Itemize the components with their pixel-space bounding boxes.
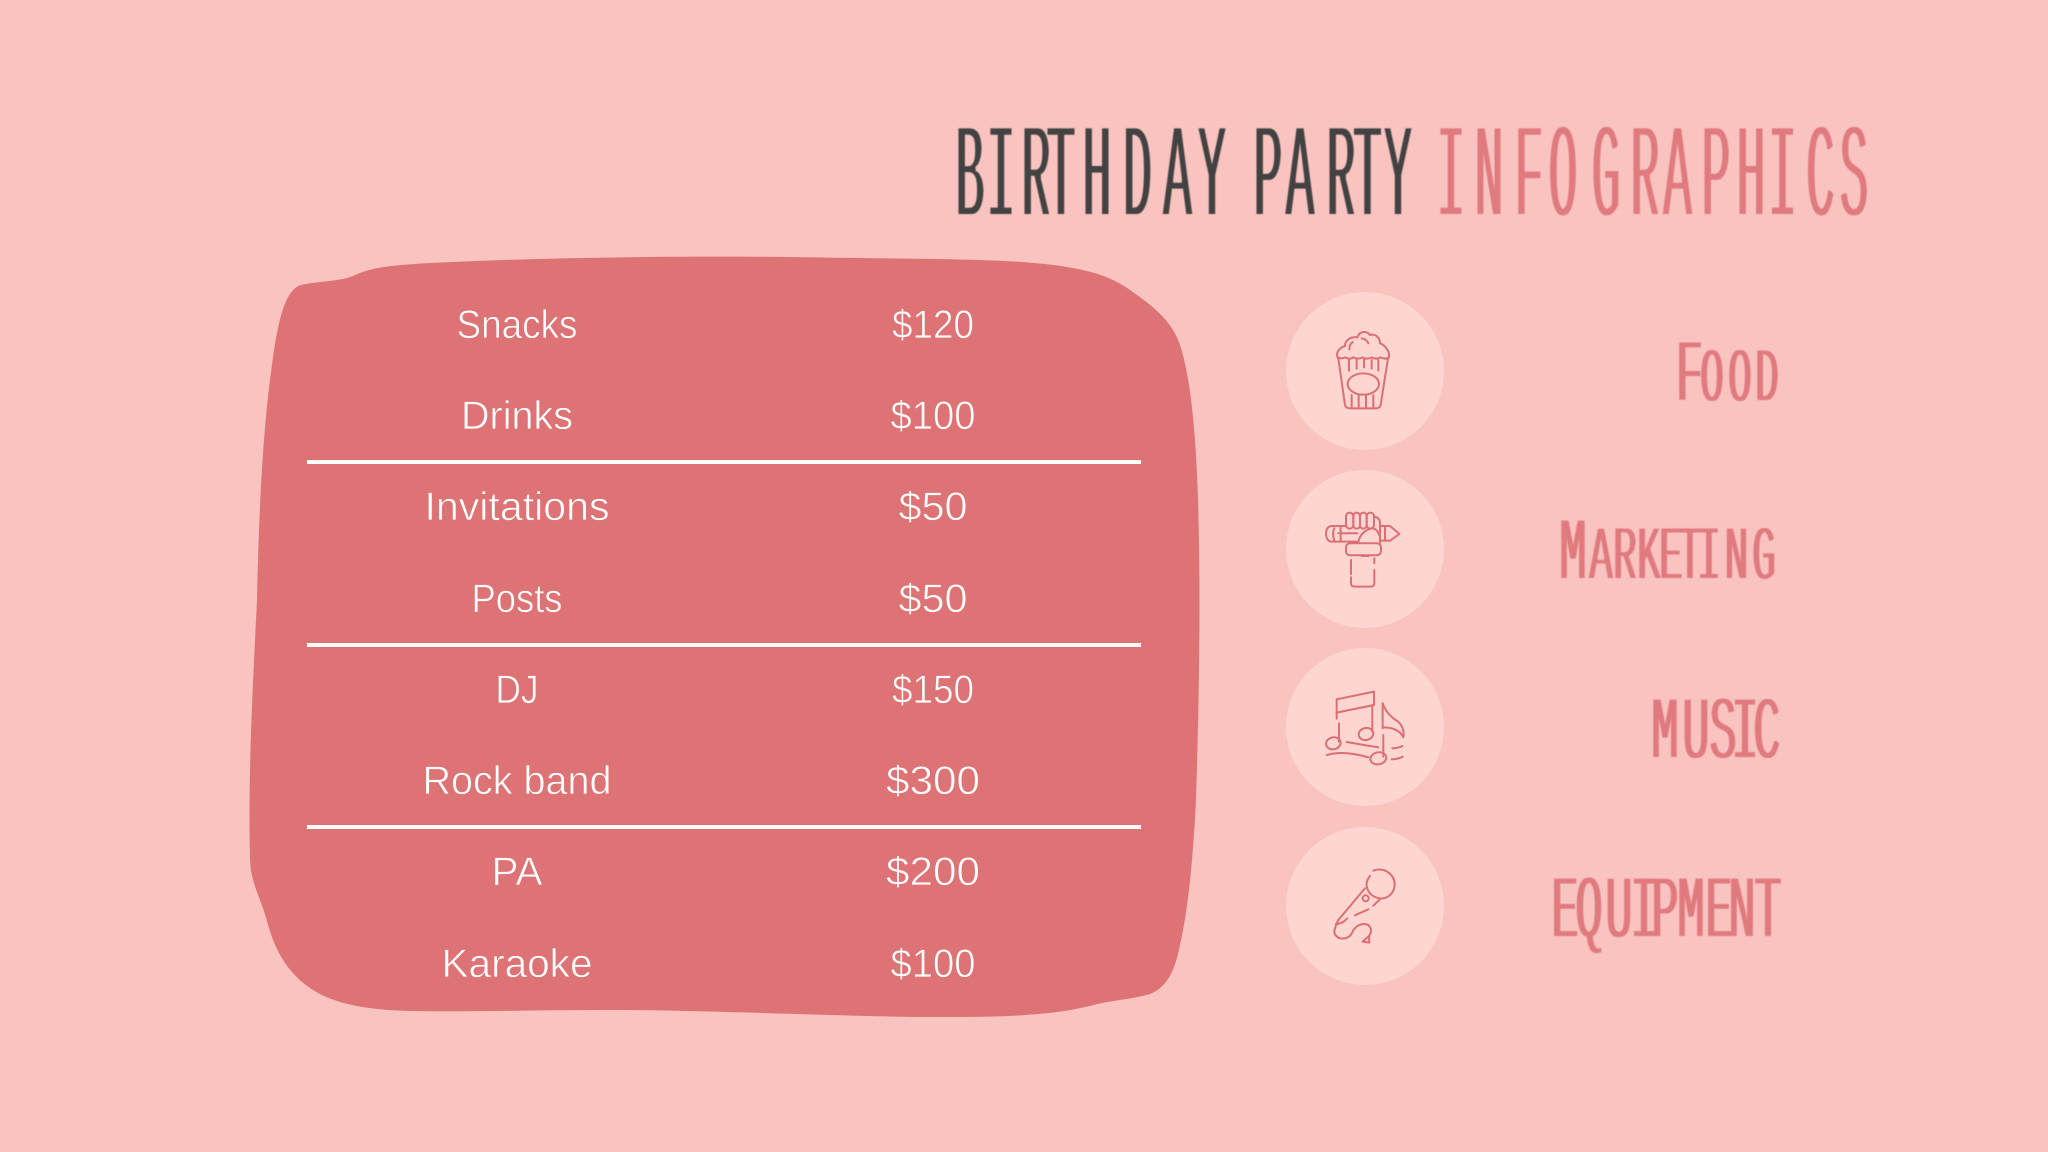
title [956,103,1868,257]
row: dj: DJ [496,668,538,712]
row: posts: $50 [898,577,968,621]
row: drinks [461,394,976,438]
row: posts: Posts [472,577,562,621]
row: pa [492,850,980,894]
row: drinks: Drinks [461,394,573,438]
row: snacks [456,303,974,347]
label: music: MUSIC [1651,685,1781,786]
row: karaoke: Karaoke [442,942,592,986]
row: pa: PA [492,850,543,894]
row: snacks: $120 [892,303,974,347]
row: rock band [422,759,980,803]
label: food: FOOD [1676,328,1779,429]
row: rock band: Rock band [422,759,612,803]
row: posts [472,577,968,621]
title: dark part: BIRTHDAY PARTY [956,103,1412,257]
label: equipment: EQUIPMENT [1551,864,1782,965]
icon: microphone [1286,827,1444,985]
row: pa: $200 [886,850,980,894]
row: karaoke [442,942,976,986]
title: pink part: INFOGRAPHICS [1437,103,1868,257]
icon: music notes [1286,648,1444,806]
row: dj: $150 [892,668,974,712]
row: dj [496,668,974,712]
row: snacks: Snacks [456,303,578,347]
icon: hand holding pencil [1286,470,1444,628]
row: invitations: $50 [898,485,968,529]
row: rock band: $300 [886,759,980,803]
icon: popcorn [1286,292,1444,450]
panel: budget table [249,257,1199,1017]
label: marketing: MARKETING [1559,506,1776,607]
row: drinks: $100 [890,394,976,438]
row: invitations: Invitations [424,485,610,529]
row: karaoke: $100 [890,942,976,986]
row: invitations [424,485,968,529]
table background blob [249,257,1199,1017]
